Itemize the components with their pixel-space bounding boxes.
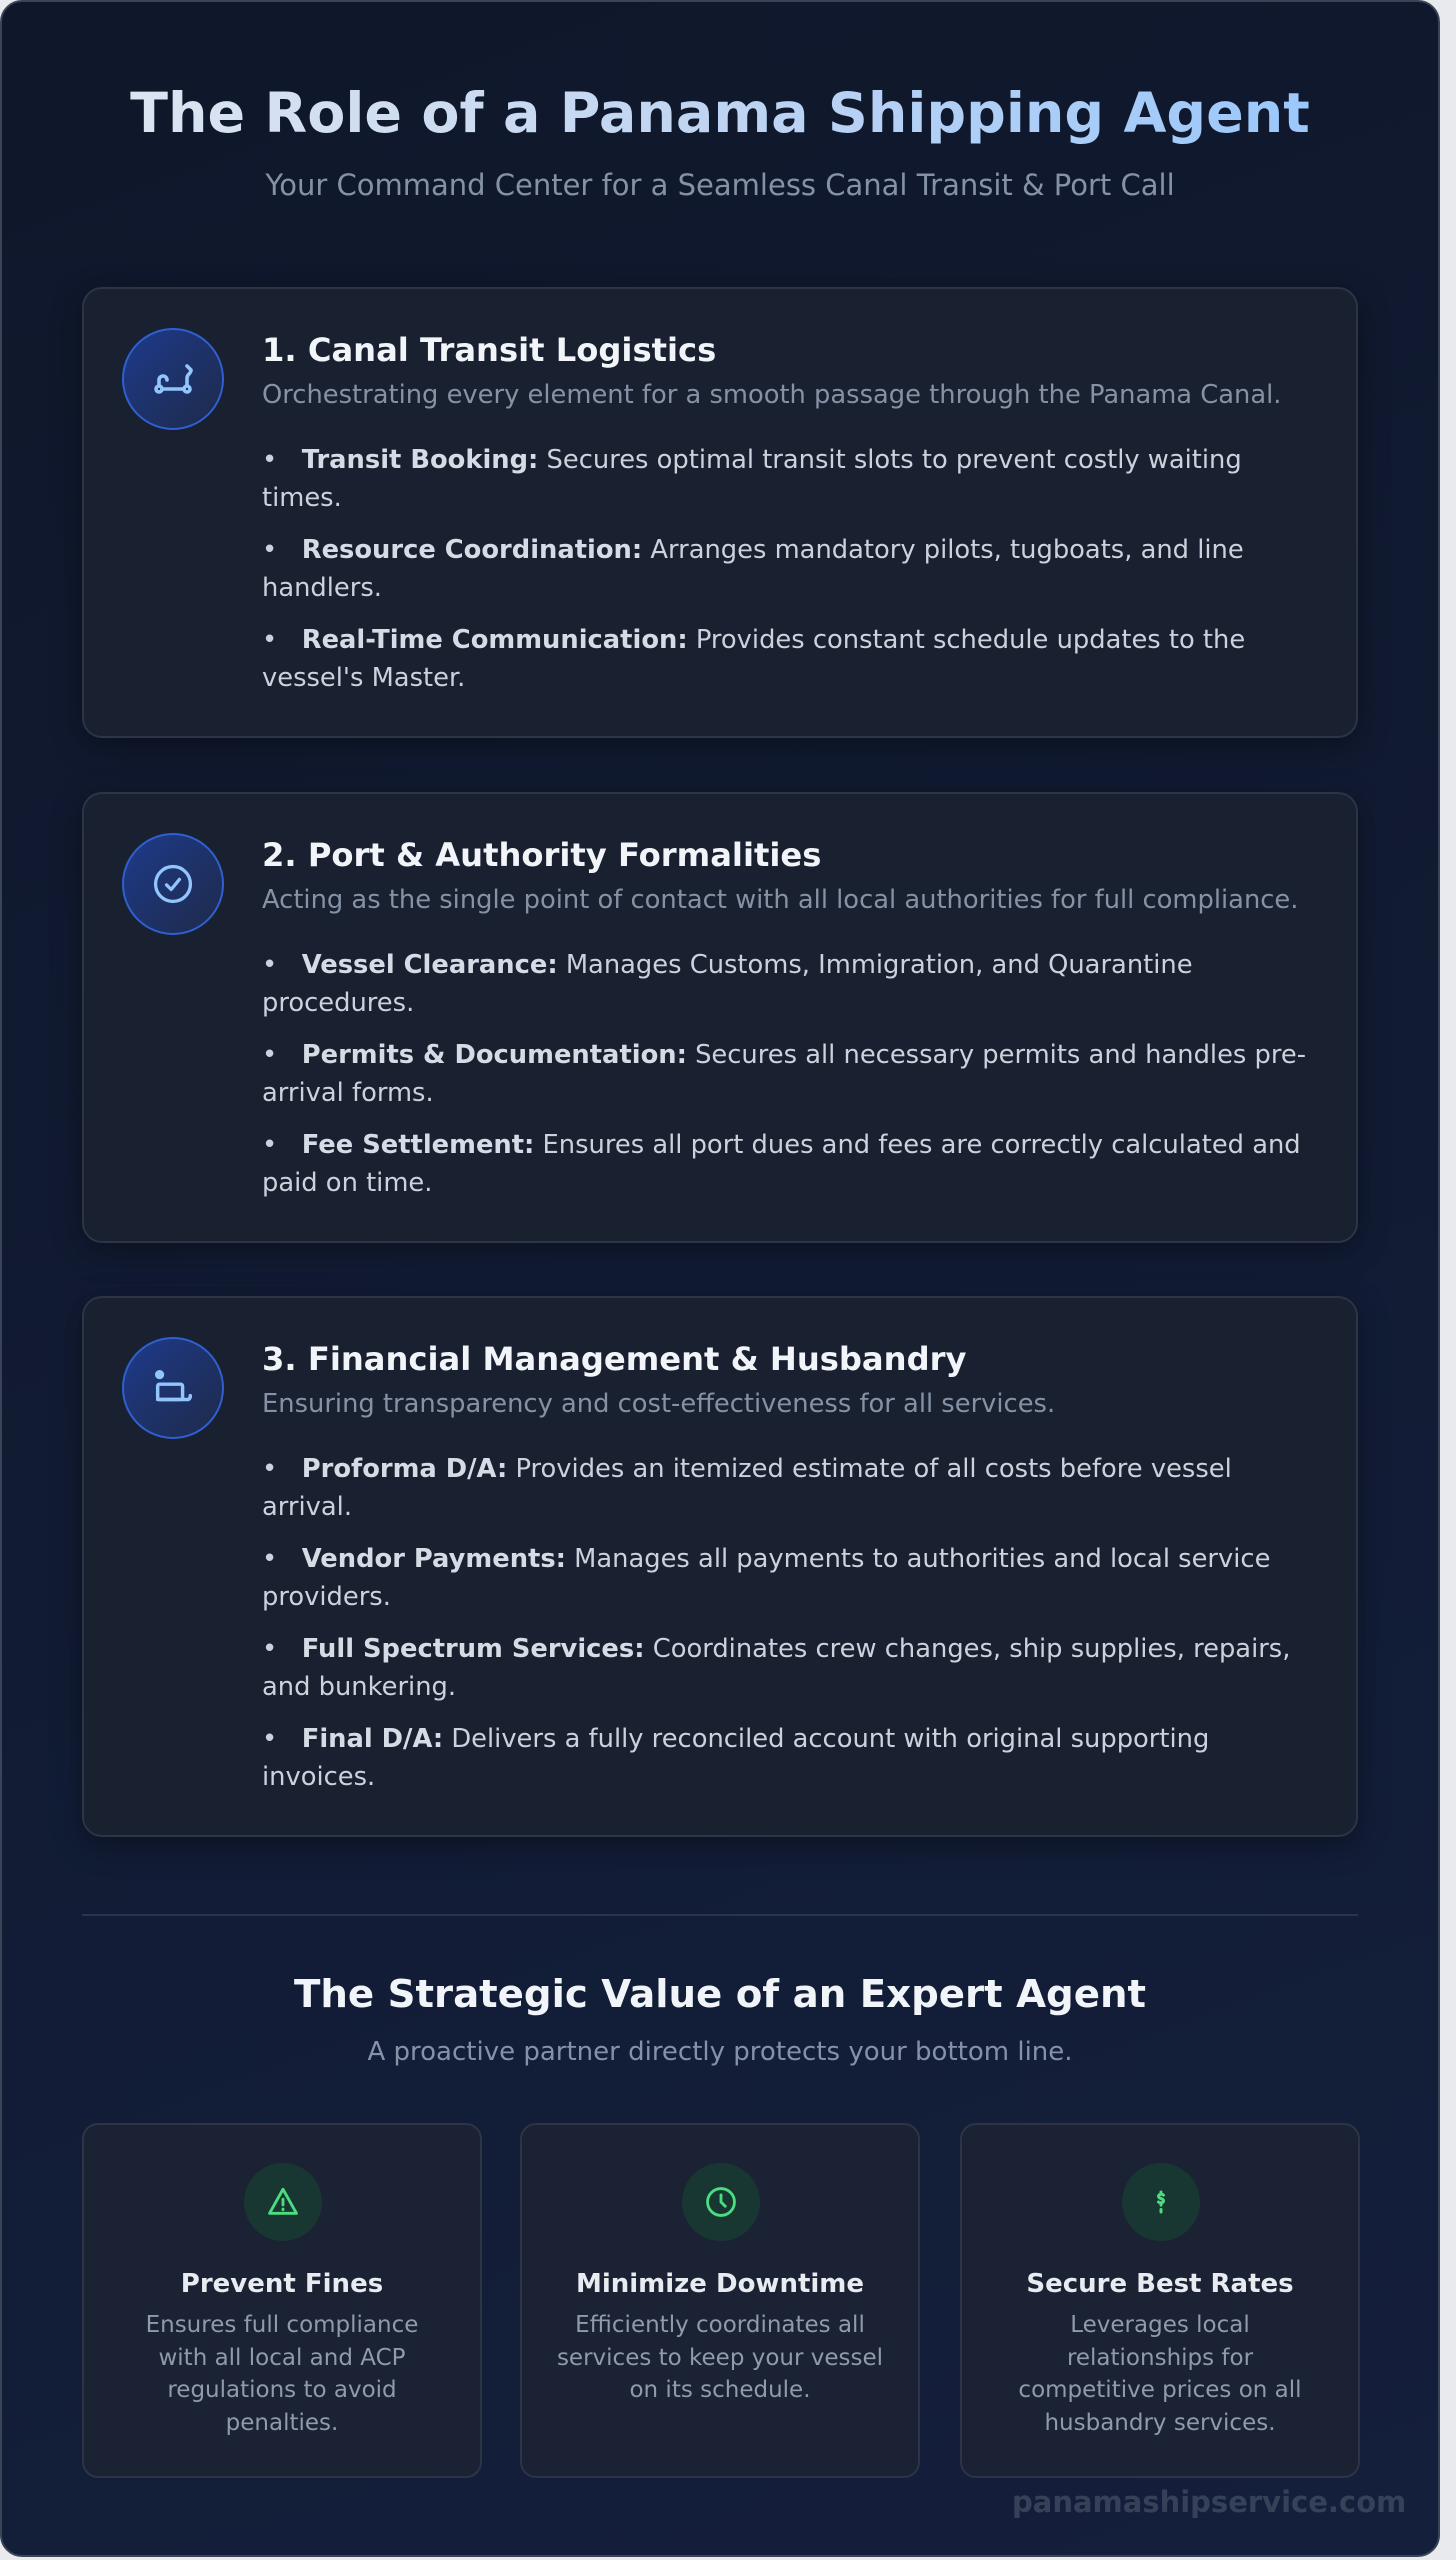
icon: payment xyxy=(122,1337,224,1439)
heading: strategic value: The Strategic Value of an Expert Agent xyxy=(294,1972,1146,2017)
panel: secure best rates: relationships for xyxy=(1067,2344,1253,2370)
text: port formalities: • Permits & Documentation: Secures all necessary permits and handles pre-arrival forms. xyxy=(262,1040,1306,1108)
subheading: A proactive partner directly protects your bottom line. xyxy=(367,2037,1073,2067)
panel: prevent fines: Prevent Fines xyxy=(181,2269,383,2299)
text: canal transit: • Transit Booking: Secures optimal transit slots to prevent costly waiting times. xyxy=(262,445,1242,513)
panel: minimize downtime: on its schedule. xyxy=(629,2377,811,2403)
text: canal transit: • Real-Time Communication: Provides constant schedule updates to the vessel's Master. xyxy=(262,625,1245,693)
watermark: panamashipservice.com xyxy=(1012,2485,1406,2519)
text: canal transit: 1. Canal Transit Logistics xyxy=(262,331,716,369)
text: financial: • Proforma D/A: Provides an itemized estimate of all costs before vessel arrival. xyxy=(262,1454,1232,1522)
icon: ship route xyxy=(122,328,224,430)
panel: canal transit logistics xyxy=(82,287,1358,738)
icon: warning xyxy=(244,2163,322,2241)
icon: clock xyxy=(682,2163,760,2241)
text: financial: • Full Spectrum Services: Coordinates crew changes, ship supplies, repairs, and bunkering. xyxy=(262,1634,1290,1702)
text: port formalities: Acting as the single point of contact with all local authorities for full compliance. xyxy=(262,885,1298,915)
panel: secure best rates: Leverages local xyxy=(1070,2312,1250,2338)
panel: port & authority formalities xyxy=(82,792,1358,1243)
subtitle: Your Command Center for a Seamless Canal Transit & Port Call xyxy=(265,168,1175,202)
panel: prevent fines: with all local and ACP xyxy=(158,2344,406,2370)
panel: minimize downtime: services to keep your vessel xyxy=(557,2344,883,2370)
panel: financial management & husbandry xyxy=(82,1296,1358,1837)
panel: minimize downtime xyxy=(520,2123,920,2478)
panel: secure best rates: competitive prices on all xyxy=(1018,2377,1302,2403)
text: financial: • Final D/A: Delivers a fully reconciled account with original supporting invoices. xyxy=(262,1724,1209,1792)
text: financial: Ensuring transparency and cost-effectiveness for all services. xyxy=(262,1389,1055,1419)
icon: dollar xyxy=(1122,2163,1200,2241)
text: canal transit xyxy=(262,331,1281,693)
text: canal transit: • Resource Coordination: Arranges mandatory pilots, tugboats, and line handlers. xyxy=(262,535,1244,603)
text: financial: 3. Financial Management & Husbandry xyxy=(262,1340,966,1378)
text: port formalities xyxy=(262,836,1306,1198)
text: port formalities: 2. Port & Authority Formalities xyxy=(262,836,821,874)
text: port formalities: • Vessel Clearance: Manages Customs, Immigration, and Quarantine procedures. xyxy=(262,950,1193,1018)
panel: secure best rates: Secure Best Rates xyxy=(1026,2269,1294,2299)
text: port formalities: • Fee Settlement: Ensures all port dues and fees are correctly calculated and paid on time. xyxy=(262,1130,1301,1198)
text: canal transit: Orchestrating every element for a smooth passage through the Panama Canal. xyxy=(262,380,1281,410)
title: The Role of a Panama Shipping Agent xyxy=(130,81,1310,146)
panel: minimize downtime: Minimize Downtime xyxy=(576,2269,864,2299)
panel: prevent fines xyxy=(82,2123,482,2478)
panel: secure best rates: husbandry services. xyxy=(1044,2410,1276,2436)
icon: check circle xyxy=(122,833,224,935)
text: financial: • Vendor Payments: Manages all payments to authorities and local service providers. xyxy=(262,1544,1270,1612)
panel: secure best rates xyxy=(960,2123,1360,2478)
panel: prevent fines: penalties. xyxy=(226,2410,338,2436)
text: financial xyxy=(262,1340,1290,1792)
panel: prevent fines: Ensures full compliance xyxy=(146,2312,418,2338)
panel: prevent fines: regulations to avoid xyxy=(167,2377,397,2403)
panel: minimize downtime: Efficiently coordinates all xyxy=(575,2312,865,2338)
